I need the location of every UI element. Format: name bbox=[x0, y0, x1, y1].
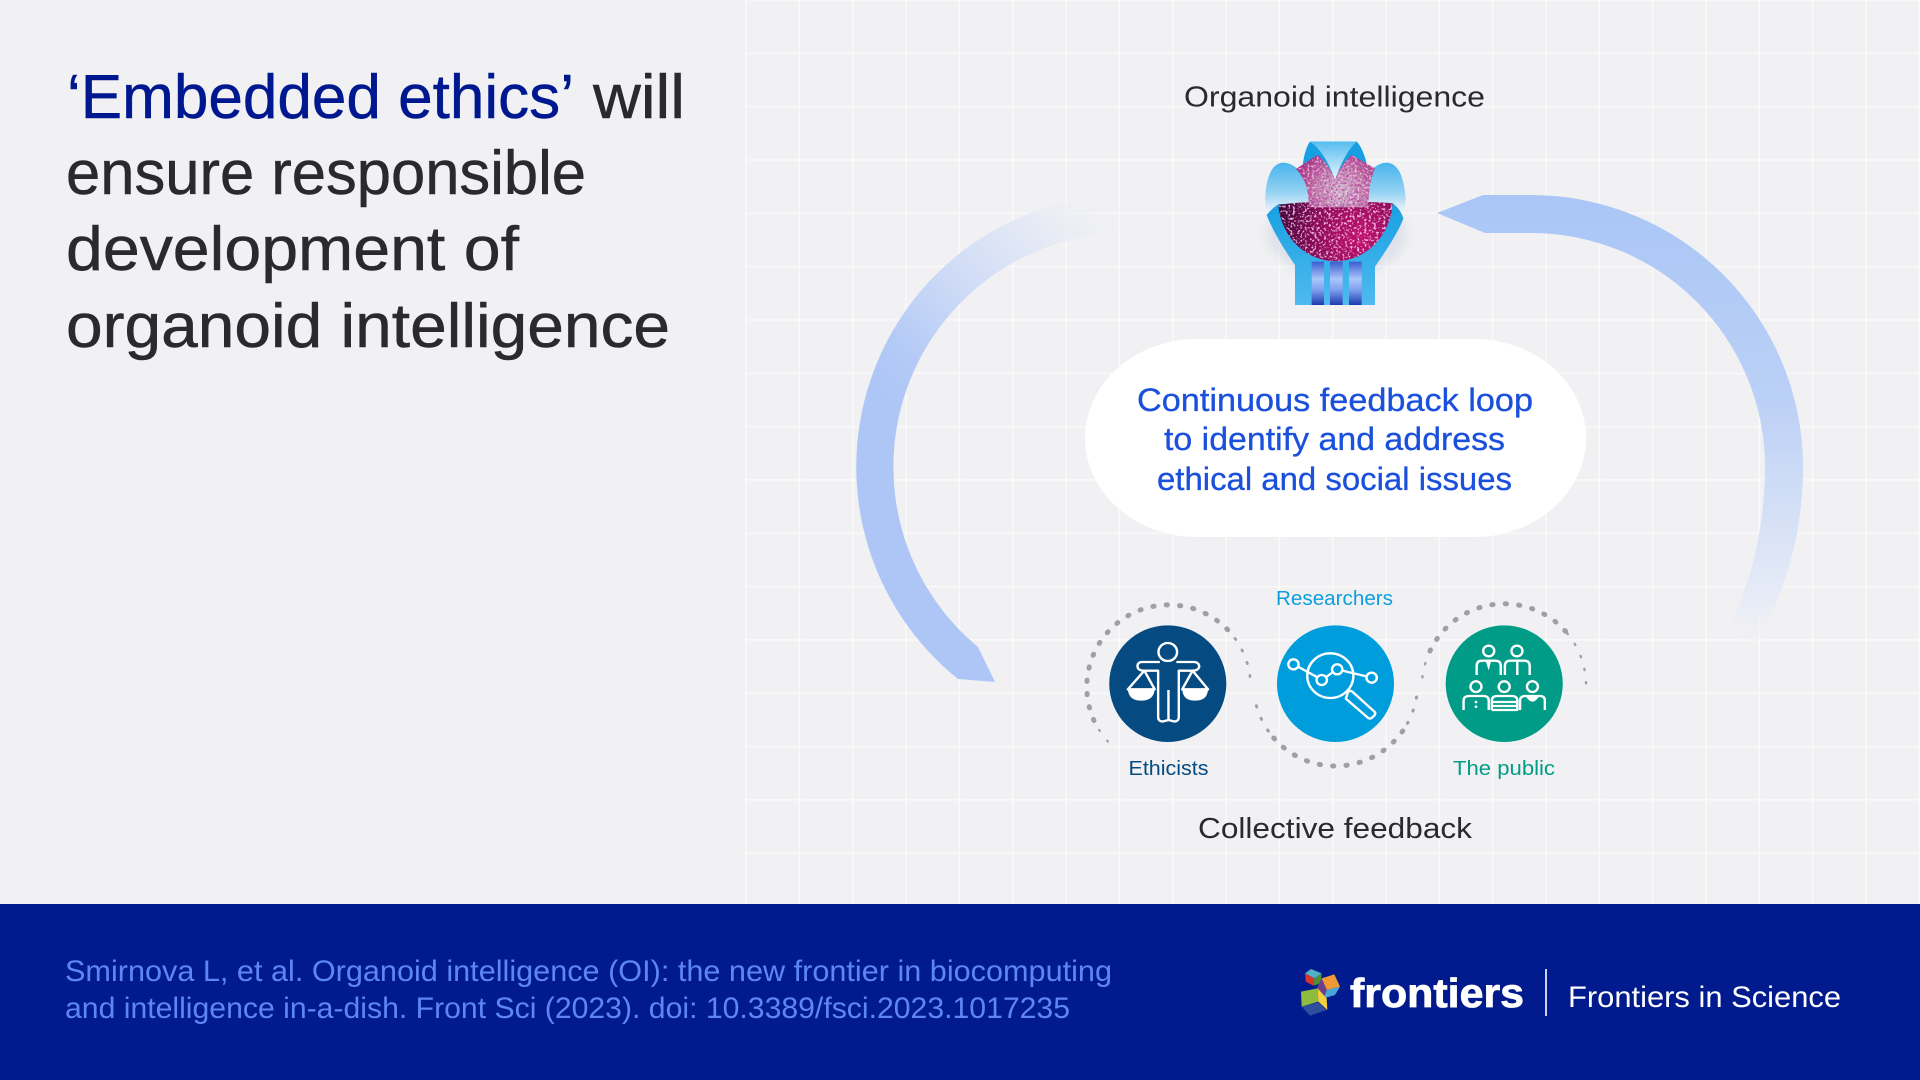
arrow: left feedback arc bbox=[856, 195, 1120, 682]
title: will bbox=[592, 63, 685, 132]
dotted ring: the public bbox=[1422, 604, 1586, 689]
callout text bbox=[1137, 382, 1533, 497]
icon: researchers magnifier bbox=[1277, 625, 1394, 742]
panel: feedback loop callout bbox=[1085, 339, 1586, 537]
title: organoid intelligence bbox=[66, 292, 670, 361]
title: highlighted phrase: ‘Embedded ethics’ bbox=[67, 63, 574, 132]
icon: the public group bbox=[1446, 625, 1563, 742]
callout text: to identify and address bbox=[1164, 421, 1505, 457]
journal name: Frontiers in Science bbox=[1568, 981, 1841, 1014]
logo wordmark: frontiers bbox=[1350, 970, 1524, 1016]
callout text: Continuous feedback loop bbox=[1137, 382, 1533, 418]
heading: organoid intelligence: Organoid intelligence bbox=[1184, 82, 1485, 114]
title bbox=[66, 63, 685, 361]
title: ensure responsible bbox=[66, 139, 586, 208]
dotted ring: ethicists bbox=[1087, 605, 1250, 742]
icon: frontiers logo cubes bbox=[1301, 969, 1340, 1016]
title: development of bbox=[66, 215, 520, 284]
citation text: and intelligence in-a-dish. Front Sci (2023). doi: 10.3389/fsci.2023.1017235 bbox=[65, 992, 1070, 1025]
arrow: right feedback arc bbox=[1437, 195, 1803, 650]
citation text: Smirnova L, et al. Organoid intelligence (OI): the new frontier in biocomputing bbox=[65, 955, 1112, 988]
dotted ring: researchers bbox=[1254, 697, 1416, 766]
label: ethicists: Ethicists bbox=[1128, 757, 1208, 780]
icon: ethicists scales bbox=[1109, 625, 1226, 742]
footer band bbox=[0, 904, 1920, 1080]
logo divider bbox=[1545, 969, 1547, 1016]
callout text: ethical and social issues bbox=[1157, 461, 1512, 497]
citation text bbox=[65, 955, 1112, 1025]
heading: collective feedback: Collective feedback bbox=[1198, 813, 1473, 845]
label: the public: The public bbox=[1453, 757, 1555, 780]
icon: organoid in a dish bbox=[1265, 142, 1407, 305]
label: researchers: Researchers bbox=[1276, 587, 1393, 610]
